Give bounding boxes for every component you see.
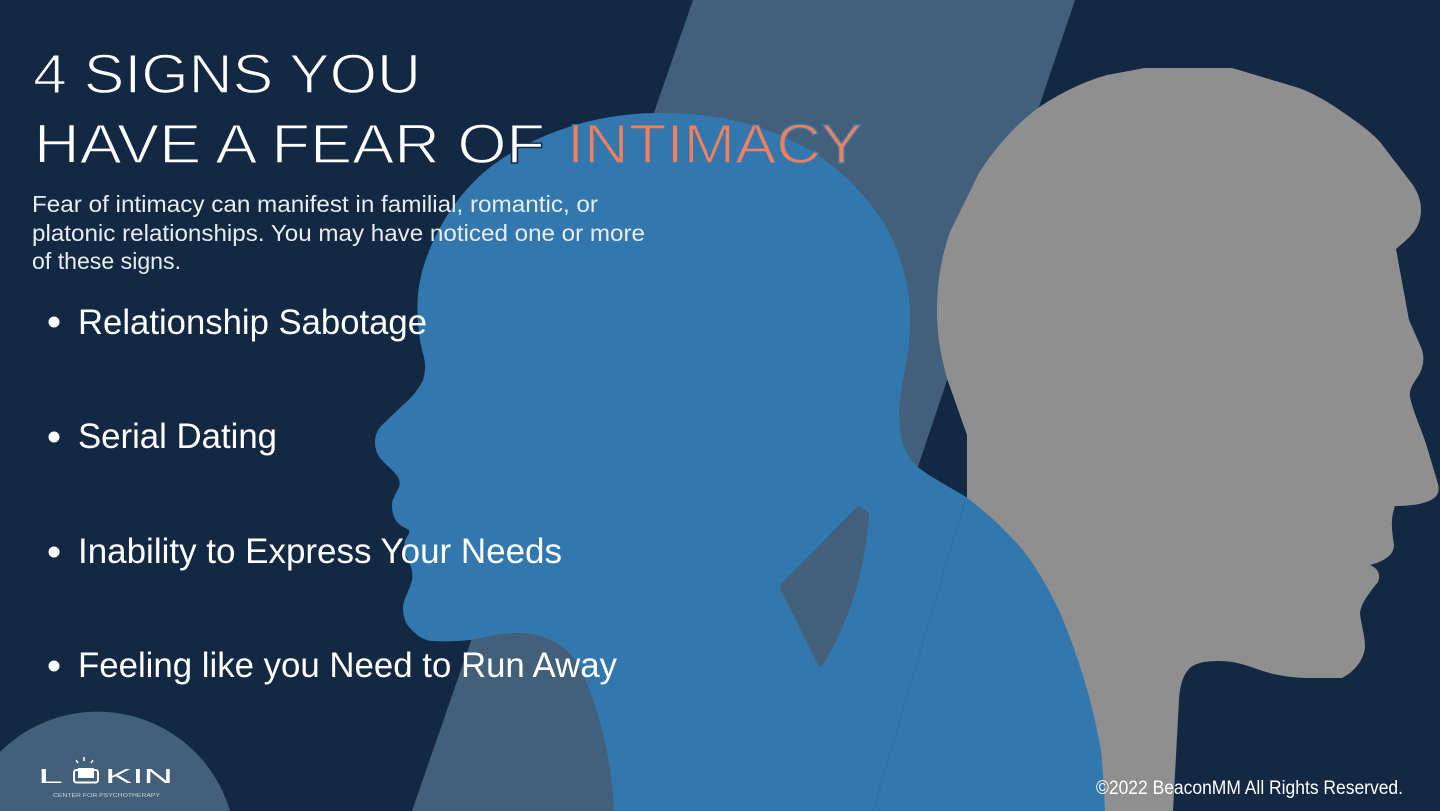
intro paragraph: Fear of intimacy can manifest in familial, romantic, or — [32, 191, 598, 217]
logo letter L: L — [38, 766, 63, 788]
sign 4: Feeling like you Need to Run Away — [78, 646, 617, 685]
bullet list of signs — [48, 303, 617, 685]
title line 1: 4 SIGNS YOU — [33, 42, 421, 105]
sign 3: Inability to Express Your Needs — [78, 532, 562, 571]
intro paragraph: platonic relationships. You may have noticed one or more — [32, 220, 645, 246]
sign 2: Serial Dating — [78, 417, 277, 456]
seam line in blue body — [873, 497, 966, 811]
icon: sofa with light rays — [74, 757, 98, 782]
logo — [38, 757, 173, 799]
blue female head silhouette — [375, 113, 1105, 811]
logo backing circle — [0, 712, 230, 811]
slate neck shard — [780, 506, 869, 667]
logo letters KIN: KIN — [105, 766, 173, 788]
intro paragraph — [32, 191, 645, 274]
title highlight word: INTIMACY — [567, 112, 862, 175]
grey male head silhouette — [900, 68, 1439, 811]
intro paragraph: of these signs. — [32, 248, 181, 274]
logo tagline: CENTER FOR PSYCHOTHERAPY — [53, 793, 161, 799]
title — [33, 42, 862, 175]
title line 2: HAVE A FEAR OF — [34, 112, 545, 175]
sign 1: Relationship Sabotage — [78, 303, 427, 342]
diagonal slate band — [412, 0, 1075, 811]
copyright: ©2022 BeaconMM All Rights Reserved. — [1096, 778, 1403, 799]
